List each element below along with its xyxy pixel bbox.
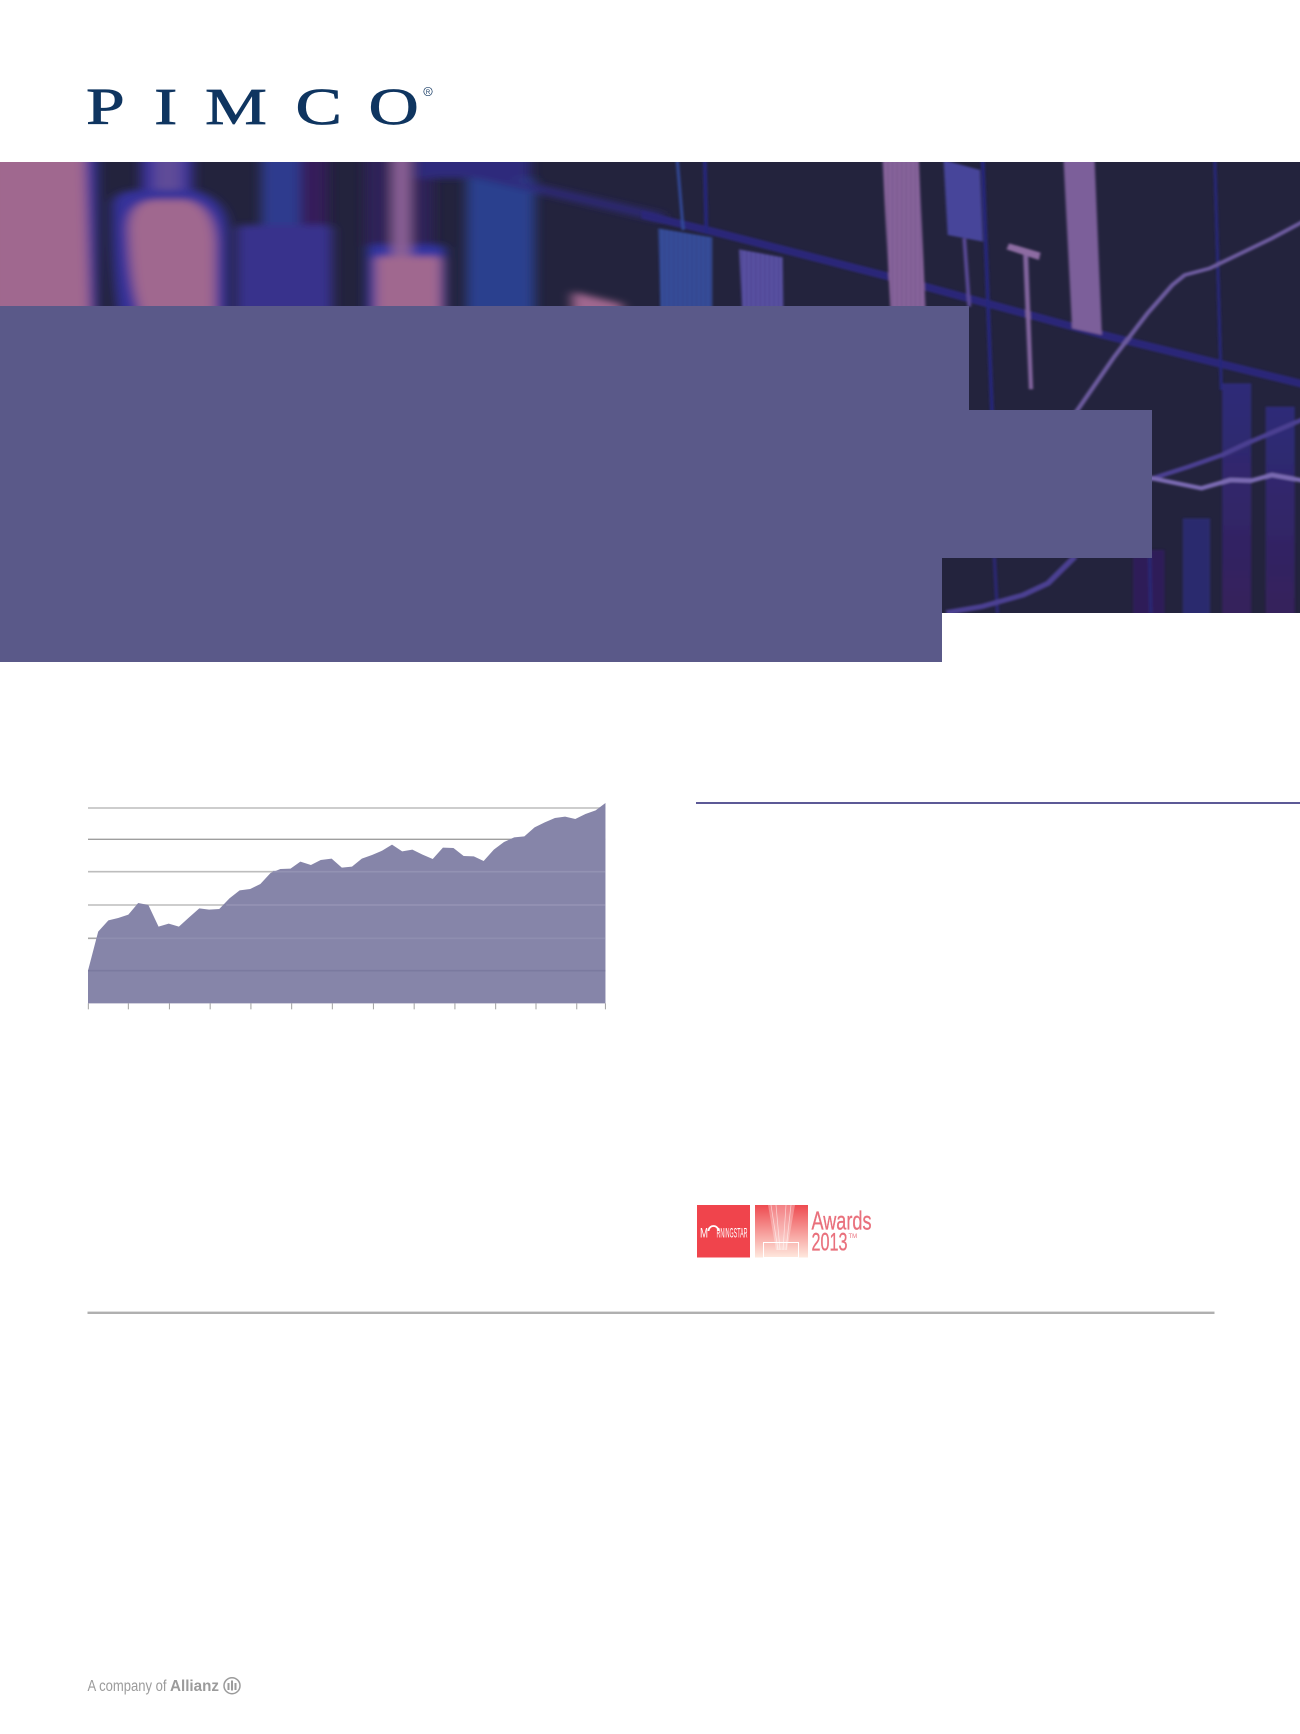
- bottom rule: [88, 1312, 1214, 1314]
- award badge: Morningstar Awards 2013: RNINGSTAR: [716, 1224, 748, 1240]
- chart x-axis ticks: [88, 1003, 605, 1009]
- hero left: blurred candles: [0, 162, 668, 306]
- hero right: candles and trend lines: [642, 157, 1300, 617]
- title panel: stepped purple block: [0, 306, 1152, 662]
- award text: TM: [848, 1234, 857, 1240]
- award text: [812, 1206, 872, 1256]
- area chart: [88, 803, 605, 1009]
- award text: Awards: [812, 1206, 872, 1236]
- footer: A company of Allianz: A company of: [88, 1678, 167, 1695]
- footer: A company of Allianz: Allianz: [170, 1678, 219, 1695]
- icon: awards stage square: [755, 1205, 808, 1258]
- logo: PIMCO: R: [426, 90, 431, 96]
- right column rule: [696, 802, 1300, 804]
- chart gridlines: [88, 808, 605, 938]
- chart area series: [88, 803, 605, 1003]
- icon: Allianz eagle roundel: [224, 1678, 240, 1694]
- icon: Morningstar red square: [697, 1205, 750, 1258]
- icon: Morningstar red square: M: [700, 1224, 708, 1240]
- award text: 2013: [812, 1228, 848, 1256]
- chart gridlines over area: [88, 872, 605, 971]
- footer: A company of Allianz: [88, 1678, 240, 1695]
- award badge: Morningstar Awards 2013: [697, 1205, 872, 1258]
- hero photo: blurred candlestick chart: [0, 150, 1300, 617]
- logo: PIMCO: PIMCO: [86, 78, 419, 136]
